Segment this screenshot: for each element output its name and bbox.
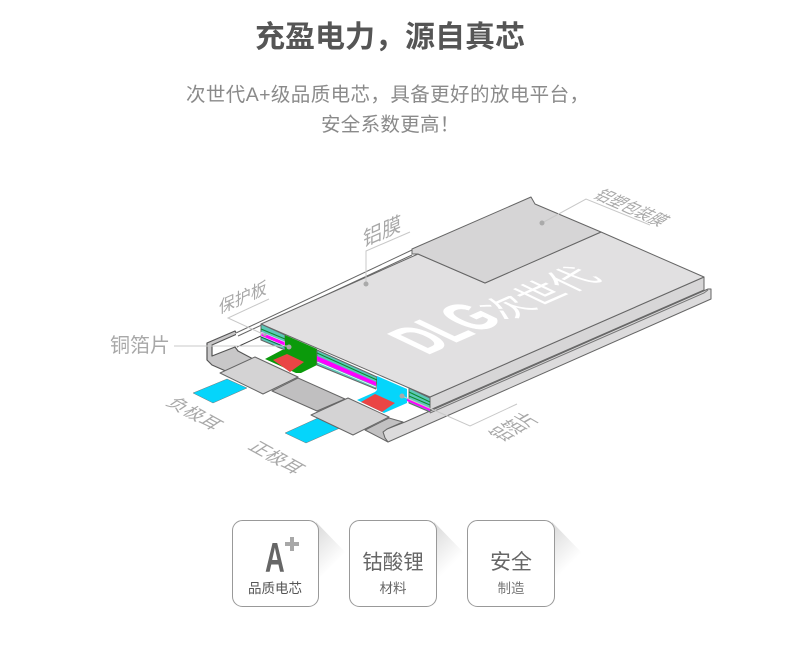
card: safe manufacturing: [468, 520, 582, 606]
label: 负极耳: 负极耳: [162, 395, 228, 433]
cell layers section 3: [407, 388, 430, 412]
card: safe manufacturing: 安全: [490, 551, 532, 574]
red pad left: [273, 354, 304, 372]
red pad right: [361, 394, 395, 412]
label: 铜箔片: [110, 334, 292, 357]
middle lower strip: [272, 378, 345, 411]
bottom foil plate: [365, 289, 711, 442]
label: 铝箔片: 铝箔片: [485, 410, 545, 445]
top aluminium film: [261, 232, 704, 397]
DLG logo: 次世代: [471, 262, 611, 325]
label: 铝塑包装膜: [540, 187, 674, 229]
upper edge of foil: [236, 249, 412, 347]
card: lithium cobalt oxide: 钴酸锂: [362, 551, 424, 574]
label: 铝塑包装膜: 铝塑包装膜: [588, 187, 674, 229]
card: lithium cobalt oxide: 材料: [380, 581, 407, 596]
cell layers section 1: [261, 324, 285, 350]
label: 铝膜: 铝膜: [363, 212, 401, 252]
cell layers section 2: [317, 350, 377, 389]
card: A+ quality: A: [265, 534, 285, 581]
copper foil green: [265, 335, 317, 373]
subtitle: 安全系数更高！: [321, 114, 460, 136]
aluminium foil cyan: [357, 376, 407, 413]
left folded lip: [207, 331, 272, 381]
battery diagram: [193, 197, 711, 443]
negative tab cyan: [193, 379, 247, 403]
card: A+ quality: [232, 520, 346, 606]
positive tab sheet: [311, 398, 389, 435]
subtitle: [186, 84, 589, 136]
label: 铝膜: [363, 212, 410, 286]
negative tab sheet: [220, 357, 298, 394]
right side wall: [430, 277, 704, 410]
card: A+ quality: 品质电芯: [248, 581, 302, 596]
label: 保护板: 保护板: [219, 277, 267, 318]
label: 铝箔片: [400, 394, 545, 445]
positive tab cyan: [285, 418, 340, 443]
card: lithium cobalt oxide: [350, 520, 464, 606]
label: 正极耳: 正极耳: [244, 439, 310, 477]
label: 保护板: [219, 277, 269, 336]
DLG logo: DLG: [373, 295, 519, 362]
subtitle: 次世代A+级品质电芯，具备更好的放电平台，: [186, 84, 589, 106]
title: 充盈电力，源自真芯: [255, 21, 525, 54]
aluminium plastic film: [412, 197, 601, 283]
label: 铜箔片: 铜箔片: [110, 334, 170, 357]
card: safe manufacturing: 制造: [498, 581, 525, 596]
